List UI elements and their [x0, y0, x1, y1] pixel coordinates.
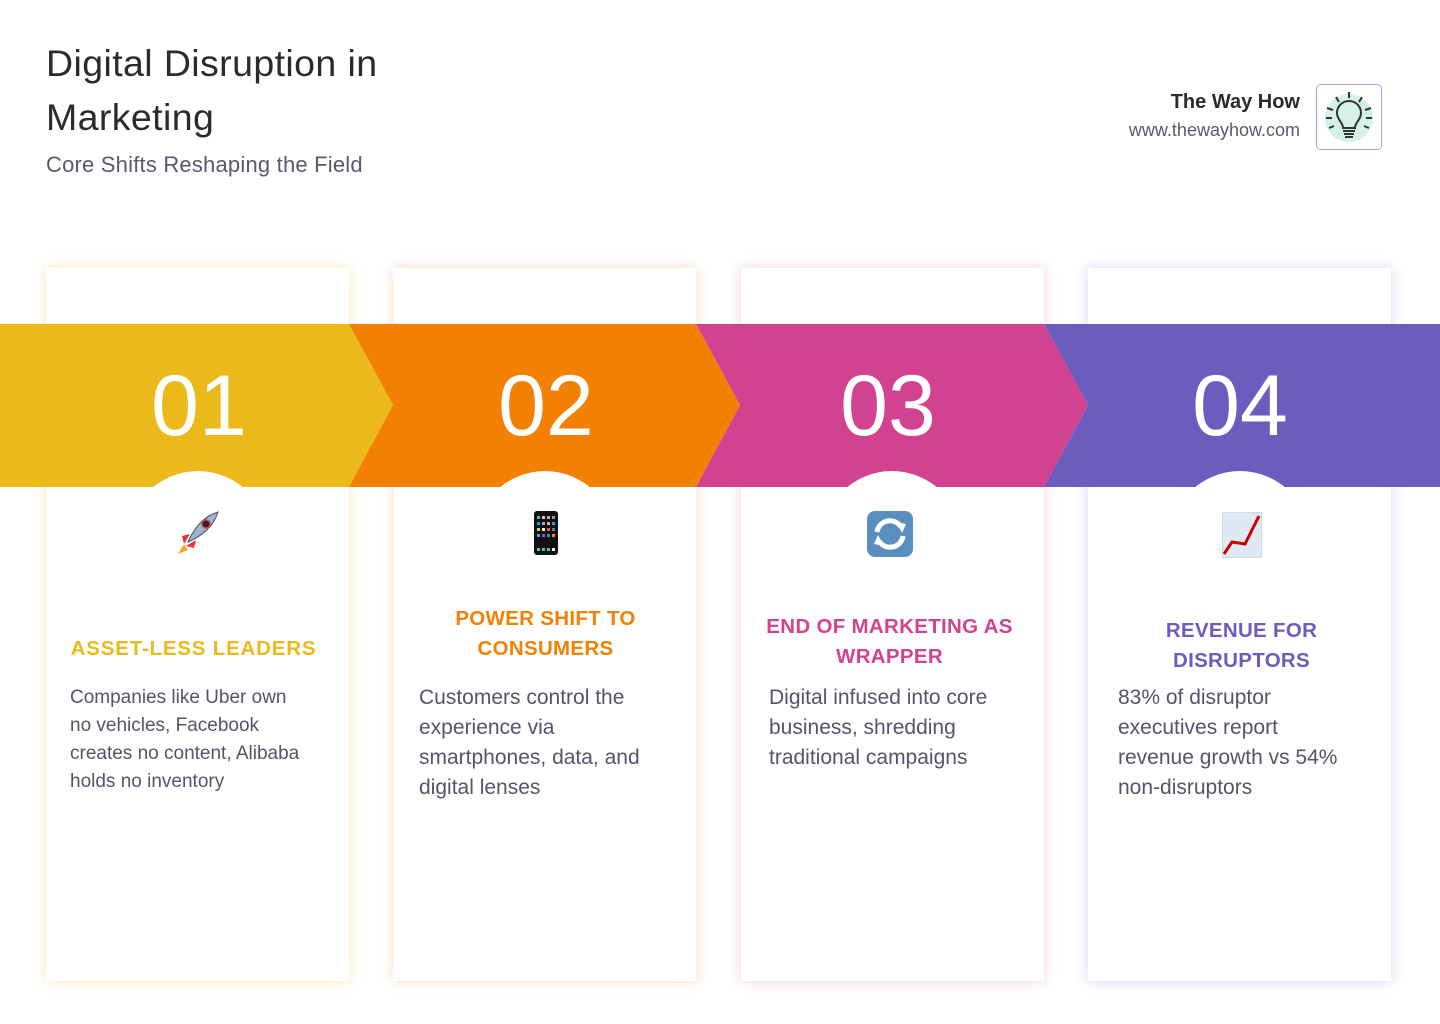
body 1: no vehicles, Facebook: [70, 715, 259, 736]
heading 2: POWER SHIFT TO: [455, 607, 636, 630]
chevron band: 02: [498, 358, 594, 454]
heading 2: CONSUMERS: [478, 637, 613, 660]
icon: lightbulb logo: [1316, 84, 1382, 150]
heading 3: END OF MARKETING AS: [766, 615, 1013, 638]
icon: arrows cycle: [867, 511, 913, 557]
heading 3: WRAPPER: [836, 645, 943, 668]
body 1: holds no inventory: [70, 771, 224, 792]
chevron band: 03: [840, 358, 936, 454]
heading 1: ASSET-LESS LEADERS: [71, 637, 316, 660]
body 1: Companies like Uber own: [70, 687, 286, 708]
brand: [1128, 84, 1382, 150]
brand: www.thewayhow.com: [1129, 120, 1300, 140]
icon: rocket: [178, 511, 219, 554]
card 2 text: [419, 607, 640, 799]
icon: phone: [534, 511, 558, 555]
brand: The Way How: [1171, 91, 1300, 113]
heading 3: [766, 615, 1013, 668]
heading 4: DISRUPTORS: [1173, 649, 1310, 672]
chevron band: [0, 324, 1440, 487]
heading 4: REVENUE FOR: [1166, 619, 1317, 642]
body 2: Customers control the experience via smartphones, data, and digital lenses: [419, 686, 640, 799]
heading 2: [455, 607, 636, 660]
title: Marketing: [46, 96, 214, 138]
body 4: 83% of disruptor executives report revenue growth vs 54% non-disruptors: [1118, 686, 1337, 799]
card 1 text: [70, 637, 316, 792]
title: [46, 42, 377, 138]
cards: [46, 268, 349, 981]
body 1: creates no content, Alibaba: [70, 743, 299, 764]
chevron band: 04: [1192, 358, 1288, 454]
body 3: Digital infused into core business, shredding traditional campaigns: [769, 686, 987, 769]
icon: chart: [1222, 512, 1262, 558]
body 1: [70, 687, 300, 792]
chevron band: 01: [151, 358, 247, 454]
subtitle: Core Shifts Reshaping the Field: [46, 152, 363, 177]
card 3 text: [766, 615, 1013, 769]
title: Digital Disruption in: [46, 42, 377, 84]
heading 4: [1166, 619, 1317, 672]
card 4 text: [1118, 619, 1337, 799]
